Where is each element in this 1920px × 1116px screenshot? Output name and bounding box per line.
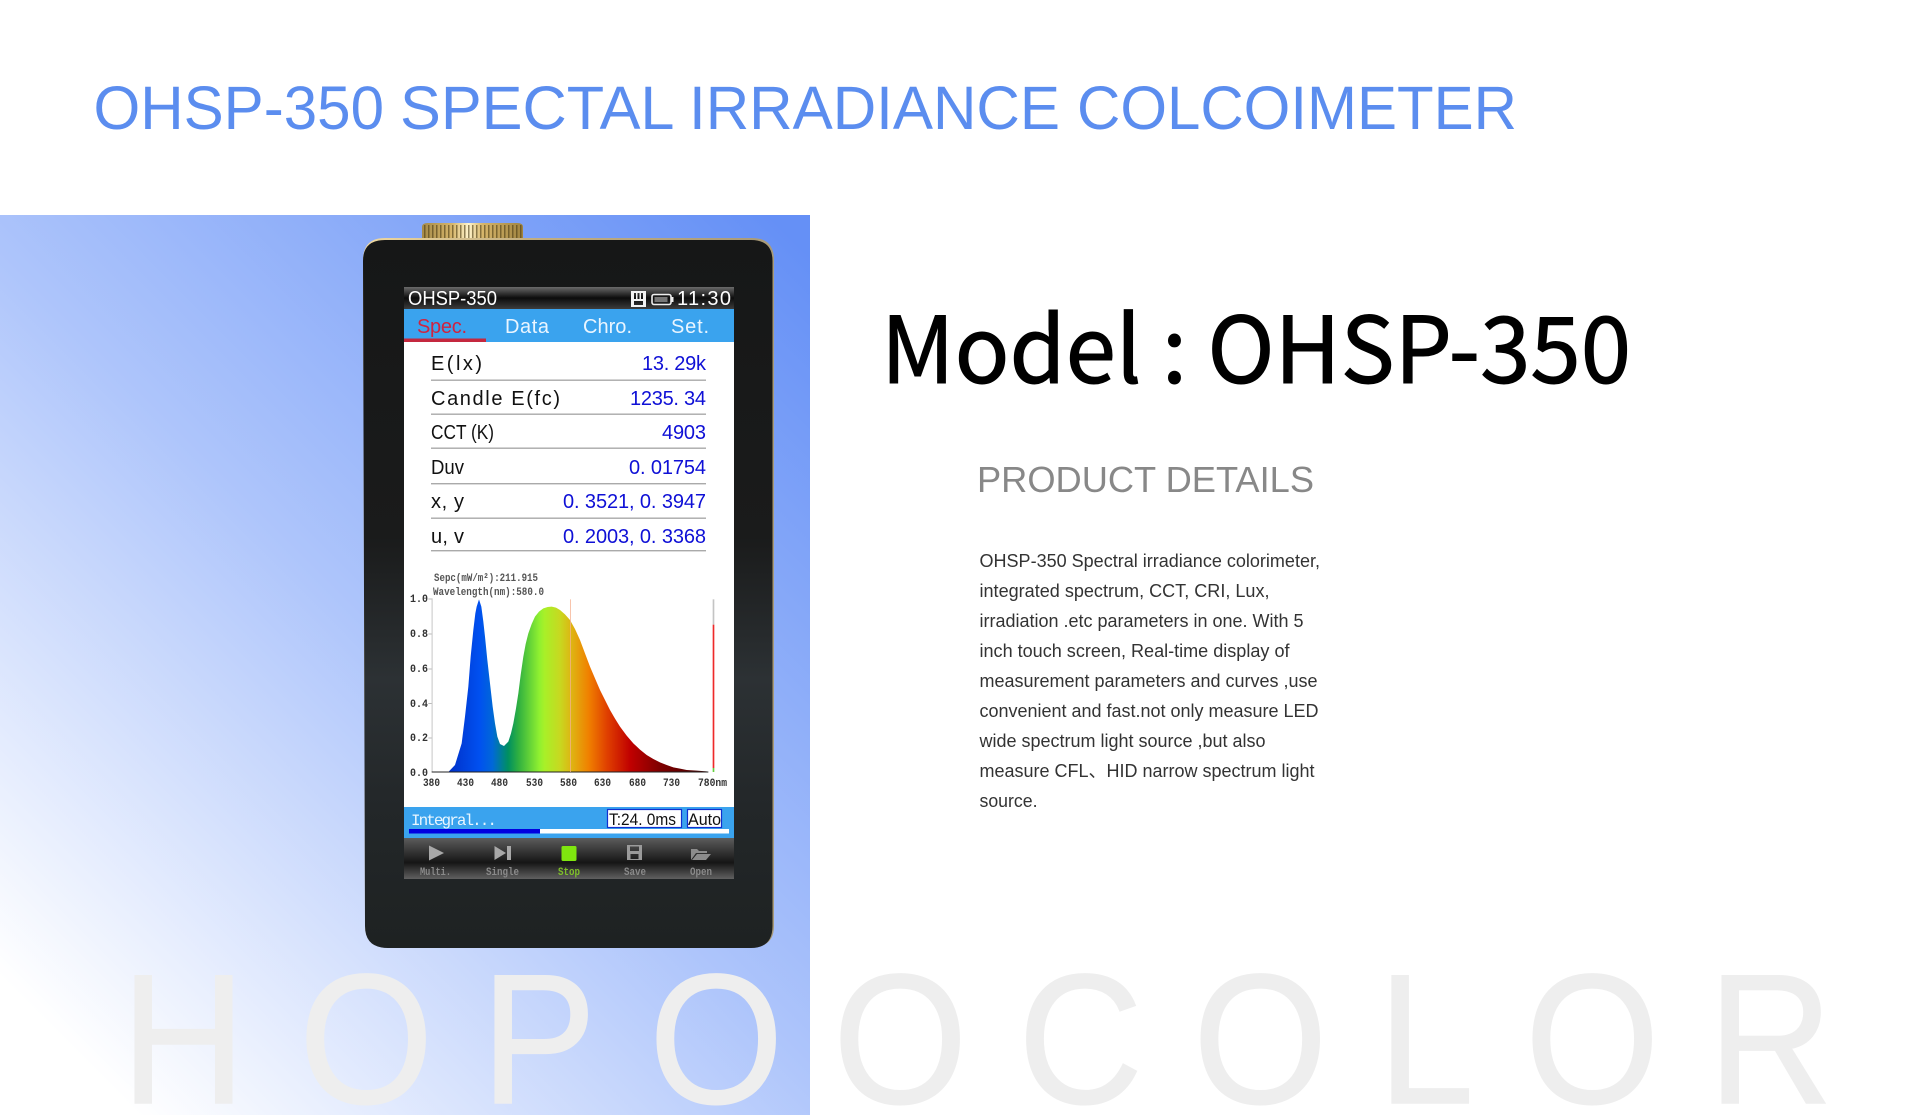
title: IRRADIANCE [689, 74, 1060, 142]
toolbar labels [420, 867, 712, 879]
readings table: CCT (K) [431, 422, 494, 444]
x axis labels: 630 [594, 778, 611, 790]
spectrum chart [410, 573, 727, 790]
description text: wide spectrum light source ,but also [979, 731, 1266, 751]
readings table: 4903 [662, 422, 706, 444]
y axis labels: 0.0 [410, 768, 428, 780]
icon: save [627, 845, 642, 860]
status bar: OHSP-350 [408, 288, 497, 310]
icon: battery [652, 294, 674, 304]
integration status bar: T:24. 0ms [609, 810, 676, 829]
description text: inch touch screen, Real-time display of [980, 641, 1290, 661]
toolbar labels: Stop [558, 867, 580, 879]
model heading: Model : OHSP-350 [881, 277, 1631, 410]
icon: open folder [691, 849, 711, 860]
title [94, 74, 1517, 142]
icon: single step [494, 846, 511, 860]
panel: gradient background [0, 215, 810, 1115]
screen [404, 287, 734, 879]
toolbar labels: Multi. [420, 867, 451, 879]
product details heading: PRODUCT DETAILS [977, 459, 1314, 500]
description text: integrated spectrum, CCT, CRI, Lux, [980, 581, 1270, 601]
status bar: 11:30 [677, 288, 731, 310]
chart caption: Wavelength(nm):580.0 [433, 587, 544, 599]
integration status bar: Auto [688, 810, 721, 829]
status bar [404, 287, 734, 310]
tab bar: Set. [671, 316, 709, 338]
x axis labels: 680 [629, 778, 646, 790]
readings table: 0. 2003, 0. 3368 [563, 526, 706, 548]
chart caption: Sepc(mW/m²):211.915 [434, 573, 538, 585]
tab bar [404, 309, 734, 342]
readings table: x, y [431, 491, 464, 513]
integration status bar [404, 807, 734, 838]
spectrum curve [428, 598, 714, 772]
tab bar: Spec. [417, 316, 467, 338]
icon: brass knob [422, 223, 523, 238]
readings table: 0. 3521, 0. 3947 [563, 491, 706, 513]
toolbar [404, 838, 734, 879]
toolbar labels: Save [624, 867, 646, 879]
device: colorimeter [363, 223, 774, 948]
icon: play [429, 846, 444, 860]
x axis labels: 530 [526, 778, 543, 790]
readings table: u, v [431, 526, 464, 548]
toolbar labels: Open [690, 867, 712, 879]
x axis labels: 730 [663, 778, 680, 790]
icon: stop [562, 846, 576, 861]
chart caption [433, 573, 544, 599]
x axis labels: 480 [491, 778, 508, 790]
description text [979, 551, 1320, 811]
readings table: Duv [431, 457, 464, 479]
x axis labels [423, 778, 727, 790]
y axis labels: 0.4 [410, 699, 428, 711]
title: OHSP-350 [94, 74, 384, 142]
y axis labels: 1.0 [410, 594, 428, 606]
icon: SD card [631, 291, 646, 307]
readings table: Candle E(fc) [431, 388, 560, 410]
y axis labels [410, 594, 428, 780]
x axis labels: 430 [457, 778, 474, 790]
readings table [431, 353, 707, 551]
toolbar labels: Single [486, 867, 519, 879]
description text: measurement parameters and curves ,use [980, 671, 1318, 691]
y axis labels: 0.8 [410, 629, 428, 641]
title: COLCOIMETER [1077, 74, 1517, 142]
description text: measure CFL、HID narrow spectrum light [980, 761, 1314, 781]
description text: irradiation .etc parameters in one. With 5 [980, 611, 1304, 631]
device body [363, 238, 774, 948]
readings table: 13. 29k [642, 353, 707, 375]
x axis labels: 580 [560, 778, 577, 790]
x axis labels: 380 [423, 778, 440, 790]
y axis labels: 0.6 [410, 664, 428, 676]
readings table: 1235. 34 [630, 388, 706, 410]
description text: convenient and fast.not only measure LED [980, 701, 1318, 721]
tab bar: Data [505, 316, 550, 338]
y axis labels: 0.2 [410, 733, 428, 745]
tab bar: Chro. [583, 316, 632, 338]
readings table: 0. 01754 [629, 457, 706, 479]
integration status bar: Integral... [411, 812, 497, 830]
description text: source. [980, 791, 1038, 811]
x axis labels: 780nm [698, 778, 727, 790]
title: SPECTAL [400, 74, 674, 142]
readings table: E(lx) [431, 353, 482, 375]
description text: OHSP-350 Spectral irradiance colorimeter, [980, 551, 1320, 571]
